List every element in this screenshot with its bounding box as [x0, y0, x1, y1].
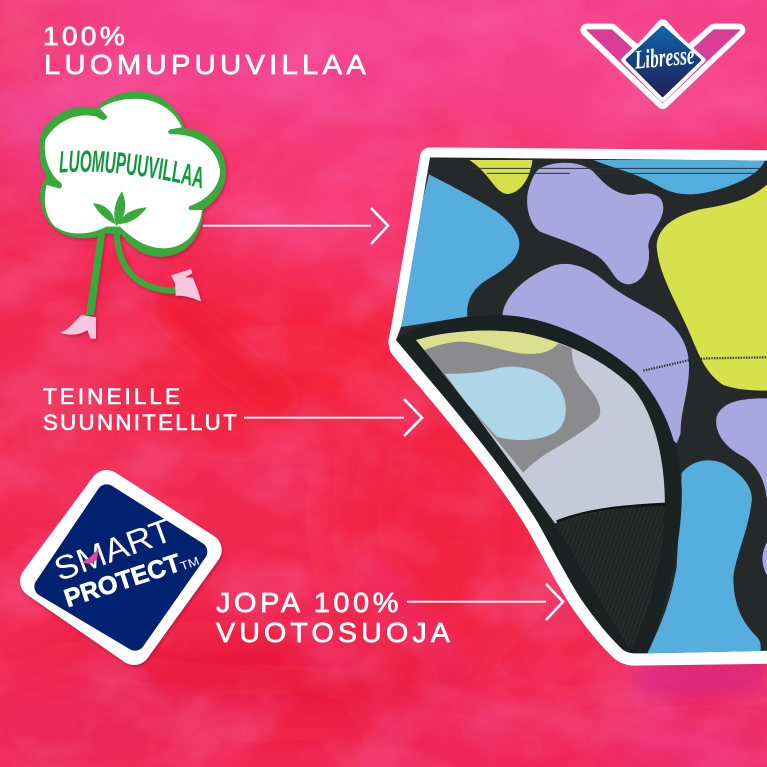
text: teineille suunnitellut [43, 384, 239, 435]
left stem and boot [60, 230, 105, 339]
heading: 100% luomupuuvillaa [43, 21, 370, 80]
logo pink v [587, 30, 739, 103]
inner fabric [416, 331, 665, 523]
badge wordmark smart: SMART [49, 512, 177, 589]
logo white v [587, 26, 739, 103]
badge trademark: TM [178, 554, 201, 573]
right stem and boot [117, 230, 201, 302]
badge: smart protect [37, 487, 205, 648]
text: jopa 100% vuotosuoja: VUOTOSUOJA [216, 617, 454, 648]
garment fabric and pattern [390, 153, 767, 657]
badge navy square [44, 494, 197, 641]
text: teineille suunnitellut: SUUNNITELLUT [43, 410, 239, 435]
logo: Libresse [587, 23, 739, 103]
badge accent [82, 548, 99, 564]
badge white square [37, 487, 205, 648]
arrow: leak protection [407, 584, 563, 620]
icon: cotton flower mascot [38, 92, 228, 342]
inner light blue patch [445, 367, 566, 440]
text: jopa 100% vuotosuoja: JOPA 100% [216, 587, 402, 618]
garment: patterned underwear [390, 153, 767, 657]
badge wordmark protect: PROTECT [61, 549, 185, 613]
arrow: cotton to garment [203, 208, 388, 244]
logo white diamond halo [623, 23, 703, 100]
heading: 100% luomupuuvillaa: LUOMUPUUVILLAA [44, 49, 370, 80]
logo navy diamond [627, 27, 699, 95]
arrow: teens [244, 399, 422, 436]
logo wordmark: Libresse [633, 40, 696, 75]
waistband stitching [470, 168, 763, 173]
gusset seam [557, 504, 666, 522]
garment white outline [398, 157, 767, 653]
heading: 100% luomupuuvillaa: 100% [43, 21, 128, 51]
leaves [93, 191, 147, 226]
cloud label: LUOMUPUUVILLAA [60, 150, 202, 188]
zigzag seam [643, 357, 767, 371]
cloud outer [39, 92, 226, 257]
text: jopa 100% vuotosuoja [216, 587, 454, 648]
garment lower outline [402, 347, 767, 653]
leg binding band [396, 315, 682, 655]
cloud white [45, 99, 220, 248]
inner grey patch [424, 342, 600, 473]
gusset [555, 505, 665, 650]
inner yellow patch [416, 331, 558, 354]
text: teineille suunnitellut: TEINEILLE [43, 384, 183, 409]
